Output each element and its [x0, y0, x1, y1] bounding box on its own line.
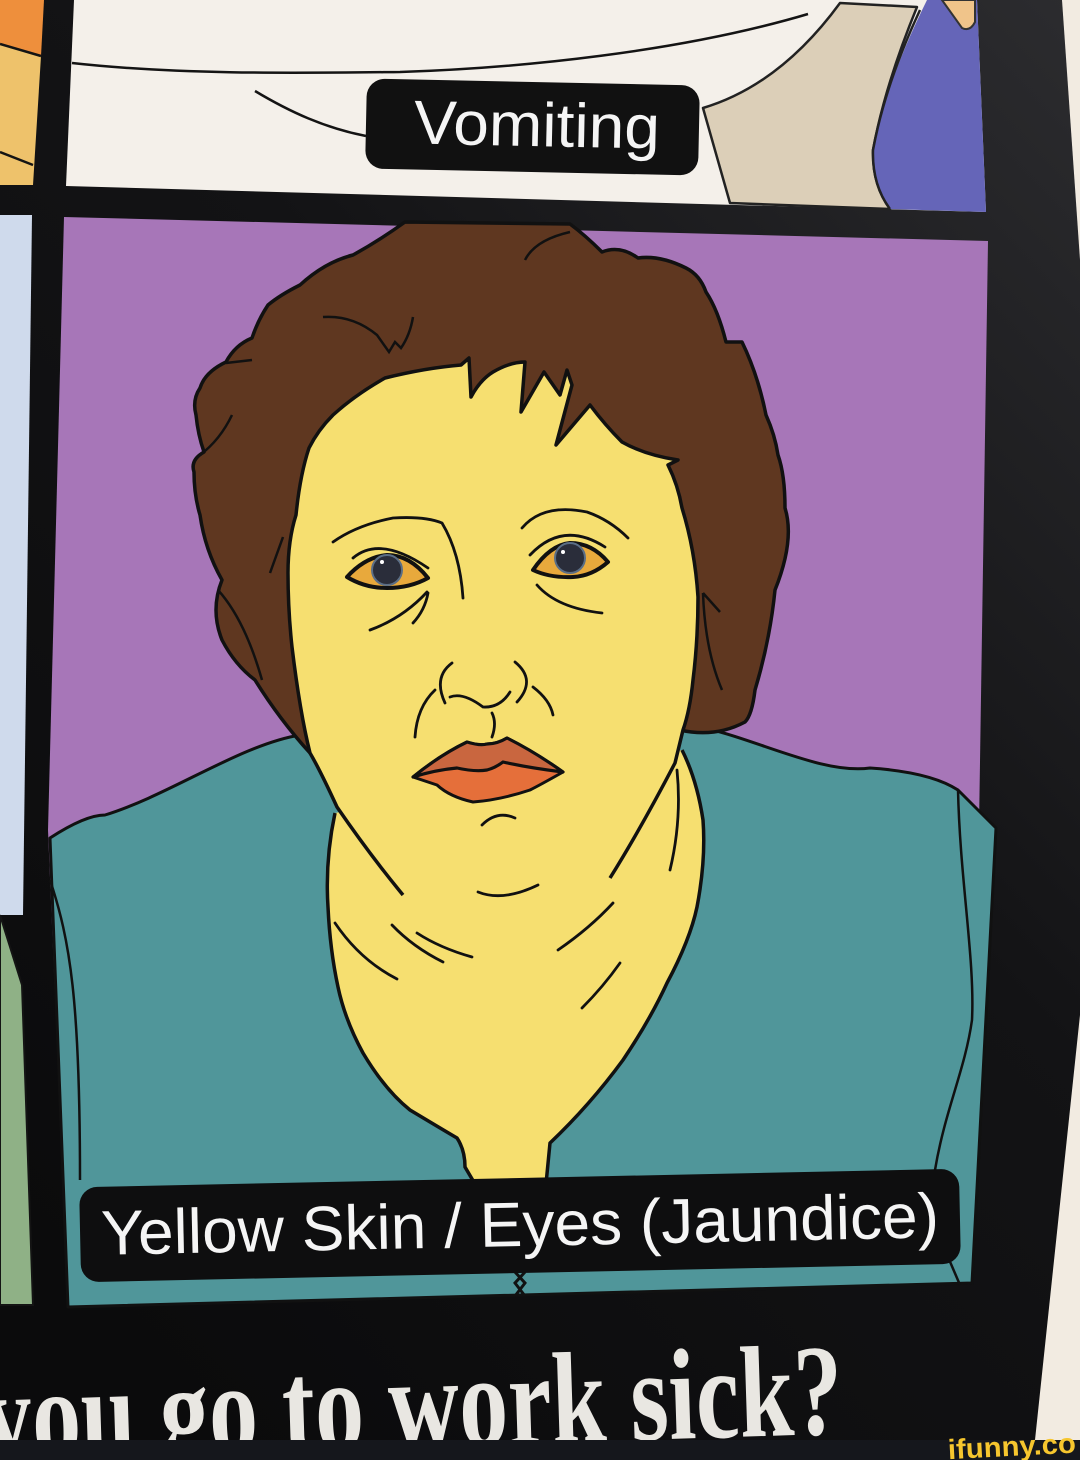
hair strands — [200, 232, 722, 690]
label: vomiting — [365, 79, 700, 175]
eye highlights — [380, 550, 565, 564]
face — [288, 358, 698, 895]
blue garment outline — [873, 10, 920, 209]
label: jaundice: Yellow Skin / Eyes (Jaundice) — [100, 1181, 940, 1269]
panel: vomiting — [66, 0, 986, 212]
tan garment — [703, 3, 917, 209]
panel: left green fragment — [0, 915, 33, 1305]
panel: top left orange fragment — [0, 0, 44, 185]
neck and chest — [327, 750, 704, 1184]
panel: left blue fragment — [0, 215, 32, 915]
irises — [372, 543, 585, 585]
shirt — [50, 725, 996, 1307]
eye whites (jaundiced orange) — [347, 543, 608, 588]
lips — [413, 738, 563, 802]
panel: jaundice portrait — [48, 217, 996, 1307]
button — [515, 1272, 525, 1296]
sheet lines — [72, 14, 808, 136]
label: vomiting: Vomiting — [413, 89, 661, 163]
hair — [193, 222, 788, 753]
bottom bar — [0, 1428, 1080, 1460]
blue garment — [873, 0, 986, 212]
facial lines: brows, nose, wrinkles — [333, 510, 678, 1008]
shirt seams — [50, 790, 972, 1285]
hand fragment — [942, 0, 975, 29]
background: purple — [48, 217, 988, 1307]
upper lip shade and mouth line — [413, 738, 563, 777]
